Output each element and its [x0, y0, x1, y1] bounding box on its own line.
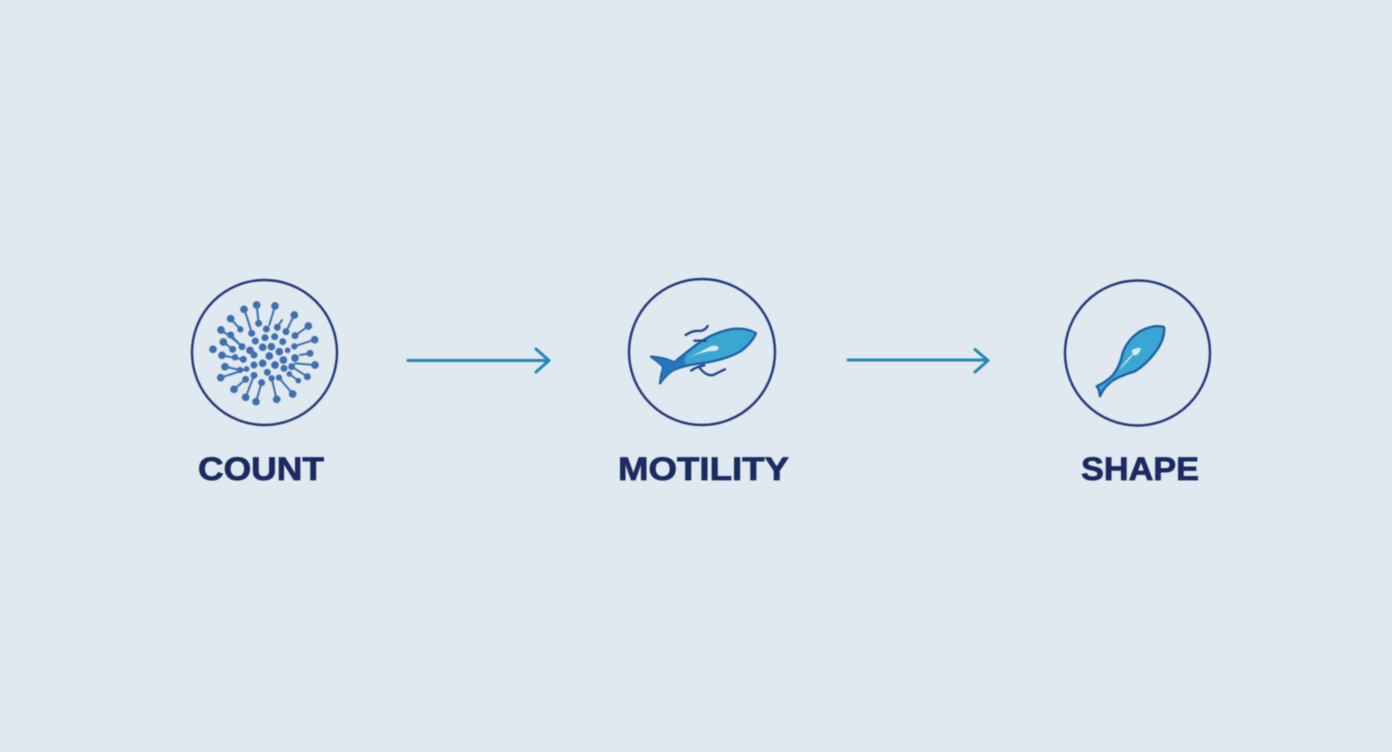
icon: count, sperm cluster in circle	[192, 280, 337, 425]
icon: shape, sperm head in circle	[1065, 280, 1210, 426]
arrow: count to motility	[408, 349, 549, 372]
arrow: motility to shape	[848, 350, 988, 372]
label: motility: MOTILITY	[618, 451, 789, 487]
icon: motility, swimming sperm in circle	[629, 279, 775, 425]
label: shape: SHAPE	[1081, 451, 1199, 487]
label: count: COUNT	[198, 451, 325, 487]
